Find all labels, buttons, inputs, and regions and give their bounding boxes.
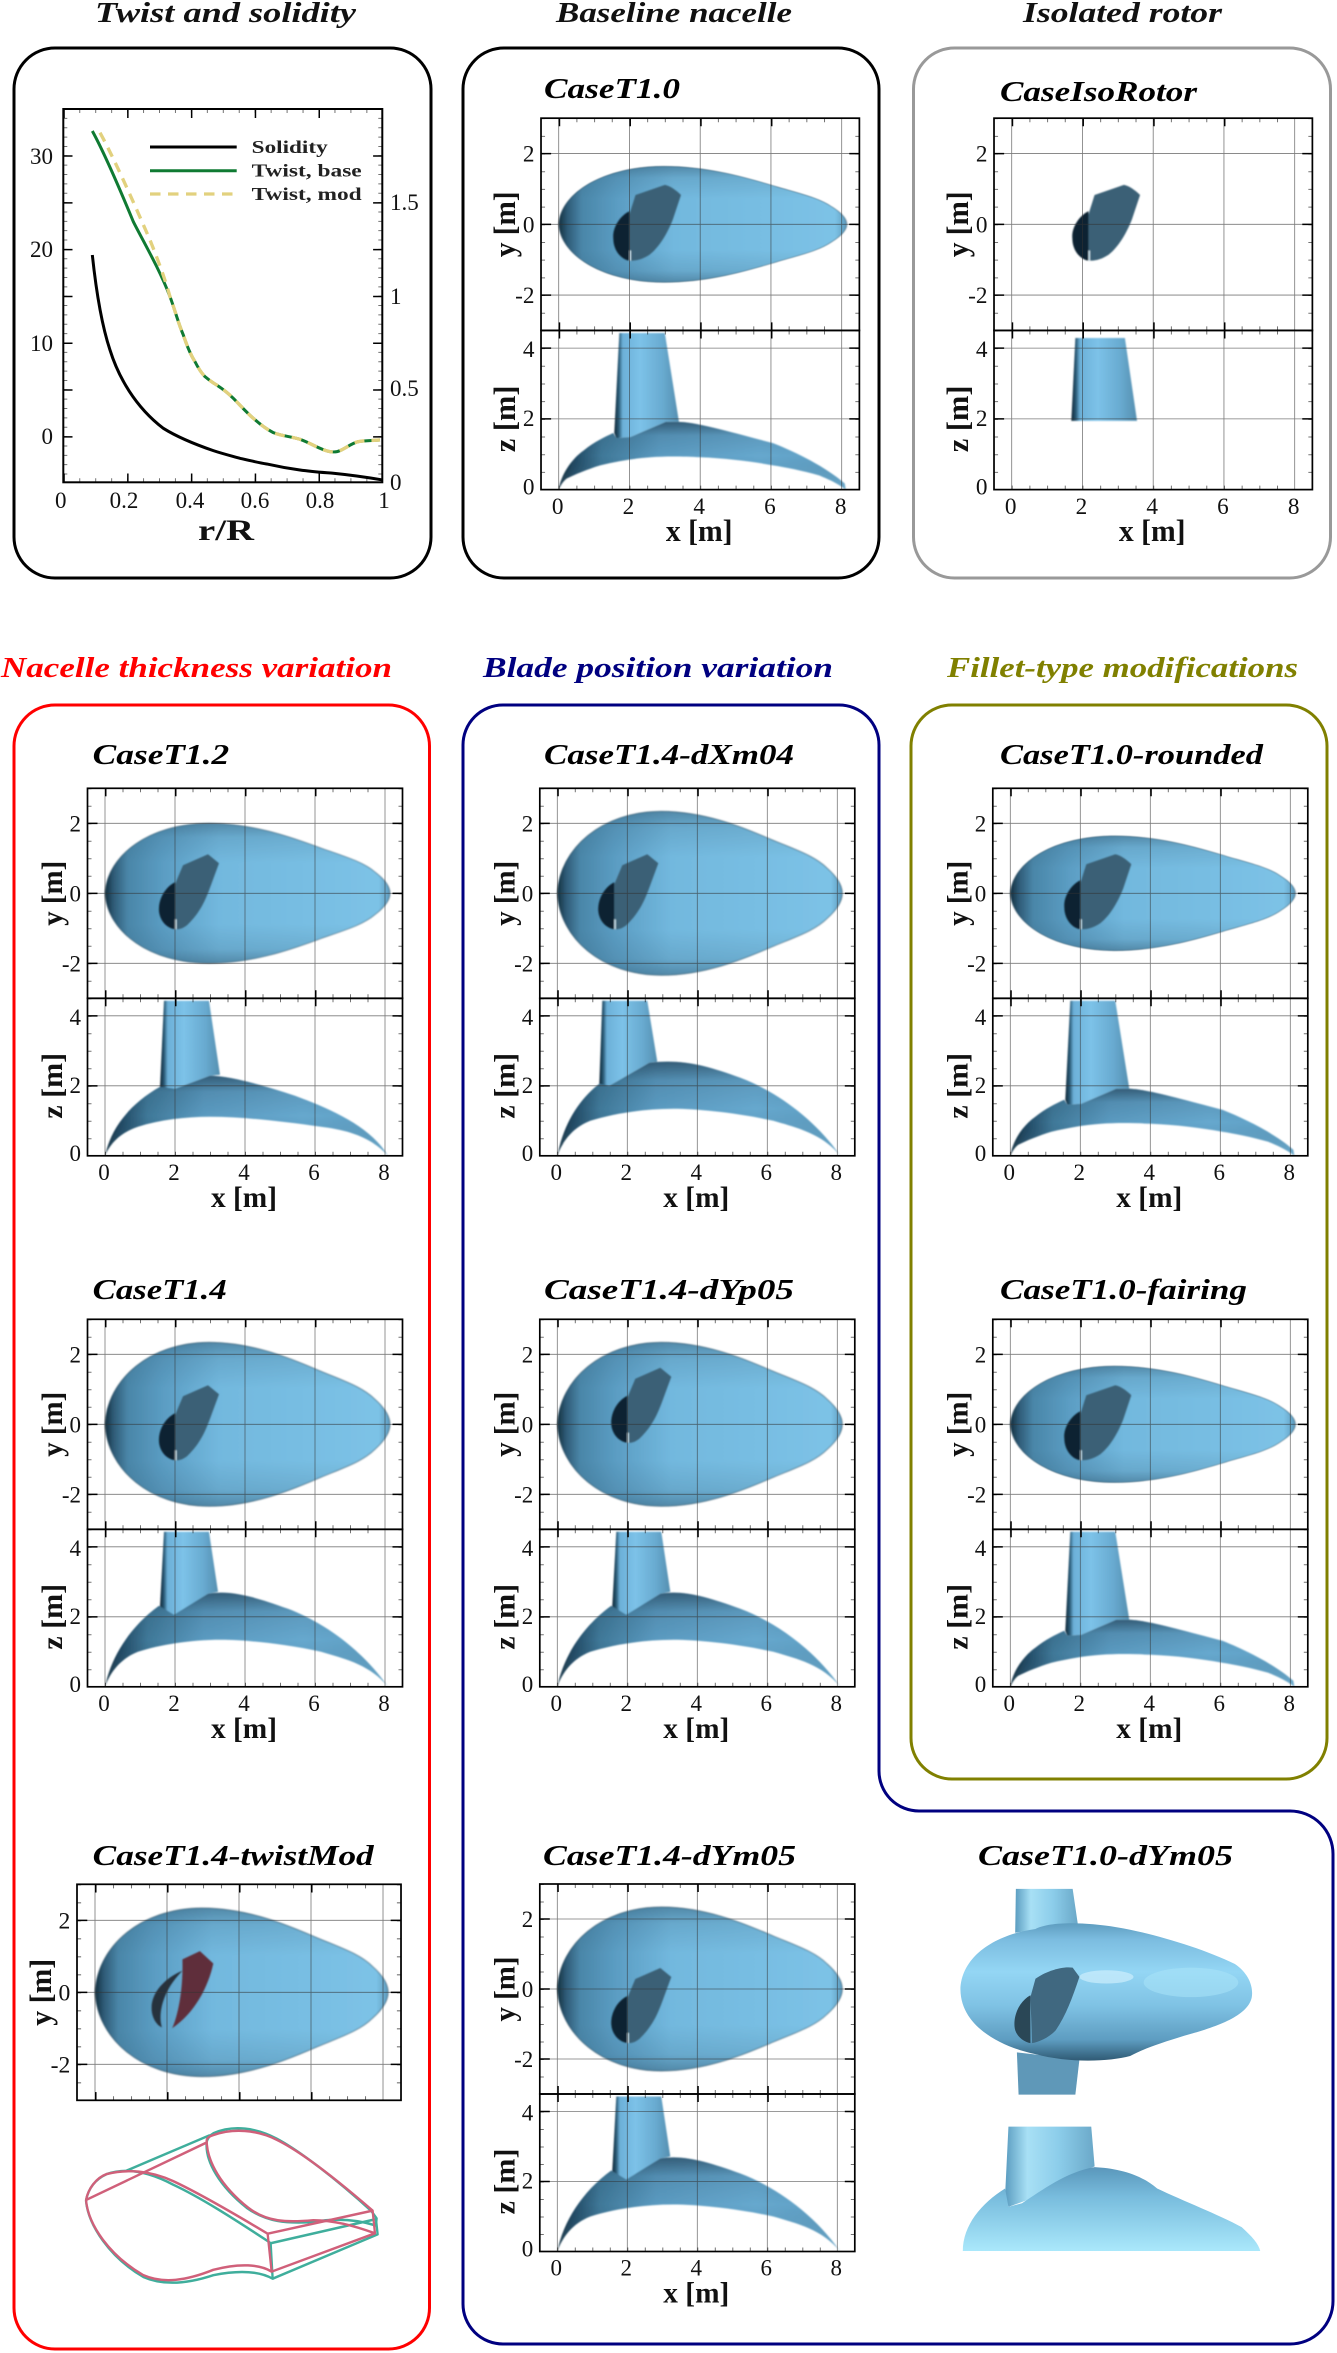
plot: CaseT1.4-dYm05 top and side views	[488, 1884, 855, 2310]
plot: CaseT1.4-dYm05 top and side views: 4	[691, 2256, 703, 2280]
plot: CaseT1.4 top and side views: x [m]	[211, 1712, 277, 1745]
left axis labels	[30, 144, 53, 449]
plot: CaseT1.4-dYp05 top and side views: 2	[621, 1691, 632, 1716]
plot: CaseT1.4 top and side views: 2	[168, 1691, 180, 1716]
plot: CaseT1.4-dXm04 top and side views: 0	[551, 1160, 562, 1185]
plot: CaseT1.4-dYp05 top and side views: 4	[691, 1691, 703, 1716]
plot: CaseT1.0 top and side views: 2	[623, 494, 634, 520]
plot: CaseT1.0-rounded top and side views	[941, 788, 1308, 1214]
plot: CaseT1.4-dYm05 top and side views: 0	[522, 1977, 533, 2002]
heading: Fillet-type modifications: Fillet-type modifications	[946, 652, 1298, 684]
right axis labels: 1.5	[390, 190, 419, 215]
plot: CaseT1.4 top and side views: 2	[70, 1604, 81, 1629]
plot: CaseIsoRotor top and side views: 2	[976, 142, 987, 168]
plot: CaseT1.4-twistMod top view: 0	[58, 1981, 70, 2007]
case title: CaseT1.4-twistMod: CaseT1.4-twistMod	[93, 1841, 375, 1872]
plot: CaseT1.0-fairing top and side views: -2	[967, 1482, 986, 1507]
case title: CaseT1.4-dYm05: CaseT1.4-dYm05	[543, 1841, 796, 1872]
right axis labels	[390, 190, 419, 495]
right axis labels: 0	[390, 470, 402, 495]
plot: CaseT1.4-dYp05 top and side views: 0	[522, 1672, 533, 1697]
panel: twist and solidity chart	[14, 48, 431, 578]
heading: Nacelle thickness variation: Nacelle thickness variation	[0, 652, 392, 684]
curve: solidity	[92, 255, 382, 480]
plot: CaseT1.4-twistMod top view: -2	[51, 2053, 70, 2079]
case title: CaseT1.0-fairing: CaseT1.0-fairing	[1000, 1275, 1247, 1306]
plot: CaseT1.4-twistMod top view: y [m]	[24, 1959, 58, 2026]
plot: CaseT1.4-dYm05 top and side views: 2	[621, 2256, 632, 2280]
plot: CaseT1.0 top and side views: 2	[523, 406, 534, 432]
plot: CaseIsoRotor top and side views: 0	[976, 475, 987, 501]
plot: CaseIsoRotor top and side views: 4	[976, 337, 988, 363]
rendering: CaseT1.0-dYm05 side view	[963, 2127, 1260, 2251]
legend: Twist, mod	[252, 184, 362, 204]
plot: CaseT1.4-dXm04 top and side views: 2	[522, 1073, 533, 1098]
case title: CaseT1.2: CaseT1.2	[93, 740, 229, 771]
plot: CaseT1.4-dYp05 top and side views: 2	[522, 1604, 533, 1629]
plot: CaseT1.2 top and side views	[36, 788, 402, 1214]
plot: CaseT1.0-rounded top and side views: 8	[1284, 1160, 1295, 1185]
case title: CaseT1.0: CaseT1.0	[544, 74, 680, 105]
plot: CaseT1.0 top and side views: 0	[523, 475, 534, 501]
plot: CaseT1.4-twistMod top view	[24, 1884, 401, 2100]
plot: CaseT1.2 top and side views: 0	[98, 1160, 110, 1185]
plot: CaseT1.4-dYp05 top and side views: 8	[831, 1691, 842, 1716]
plot: CaseT1.4-dYm05 top and side views: 2	[522, 2168, 533, 2194]
plot: CaseIsoRotor top and side views: 0	[1005, 494, 1017, 520]
plot: CaseIsoRotor top and side views: 6	[1217, 494, 1229, 520]
plot: CaseT1.4-dXm04 top and side views: 0	[522, 881, 533, 906]
plot: CaseT1.0 top and side views	[488, 118, 859, 548]
panel: nacelle thickness variation	[14, 705, 430, 2349]
plot: CaseT1.4-dYp05 top and side views: -2	[514, 1482, 533, 1507]
plot: CaseT1.4-dXm04 top and side views: 4	[522, 1005, 534, 1030]
plot: CaseT1.4 top and side views: y [m]	[36, 1392, 69, 1457]
plot: CaseT1.4 top and side views: -2	[62, 1482, 81, 1507]
plot: CaseT1.2 top and side views: 0	[70, 1141, 81, 1166]
plot: CaseT1.4-dYm05 top and side views: 2	[522, 1907, 533, 1932]
curve: twist, base	[92, 131, 380, 452]
plot: CaseT1.4 top and side views: 0	[70, 1672, 81, 1697]
plot: CaseT1.0-fairing top and side views: 0	[1004, 1691, 1015, 1716]
plot: CaseT1.4 top and side views: 4	[70, 1536, 82, 1561]
plot: CaseT1.0-fairing top and side views: x [m]	[1116, 1712, 1182, 1745]
plot: CaseT1.0-rounded top and side views: y [m]	[941, 861, 974, 926]
plot: CaseT1.4-dYp05 top and side views	[488, 1319, 855, 1745]
plot: CaseIsoRotor top and side views: 2	[976, 406, 987, 432]
plot: CaseT1.0-rounded top and side views: 4	[1144, 1160, 1156, 1185]
plot: CaseT1.0-fairing top and side views: 4	[975, 1536, 987, 1561]
plot: CaseT1.4-dXm04 top and side views: y [m]	[488, 861, 521, 926]
plot: CaseT1.0-fairing top and side views: 4	[1144, 1691, 1156, 1716]
plot: CaseT1.2 top and side views: 2	[70, 811, 81, 836]
plot: CaseT1.0 top and side views: 0	[552, 494, 564, 520]
plot: CaseT1.4-dYm05 top and side views: y [m]	[488, 1956, 521, 2022]
plot: CaseT1.4-dXm04 top and side views	[488, 788, 855, 1214]
case title: CaseT1.4-dXm04: CaseT1.4-dXm04	[544, 740, 794, 771]
case title: CaseT1.4-dYp05: CaseT1.4-dYp05	[544, 1275, 794, 1306]
plot: CaseIsoRotor top and side views: z [m]	[941, 386, 975, 452]
plot: CaseT1.4-dYm05 top and side views: 6	[761, 2256, 772, 2280]
plot: CaseT1.4-dYm05 top and side views: 0	[551, 2256, 562, 2280]
x axis labels: 0.8	[306, 488, 334, 513]
plot: CaseT1.2 top and side views: 4	[70, 1005, 82, 1030]
plot: CaseT1.0-rounded top and side views: 6	[1214, 1160, 1225, 1185]
plot: CaseT1.4 top and side views: 4	[238, 1691, 250, 1716]
plot: CaseT1.0-rounded top and side views: 2	[1074, 1160, 1085, 1185]
plot: CaseT1.2 top and side views: x [m]	[211, 1181, 277, 1214]
x axis labels: 0.2	[110, 488, 138, 513]
left axis labels: 0	[42, 424, 53, 449]
plot: CaseT1.0-fairing top and side views: 2	[975, 1342, 986, 1367]
plot: CaseT1.0-rounded top and side views: 0	[975, 1141, 986, 1166]
plot: CaseIsoRotor top and side views: 0	[976, 212, 987, 238]
plot: CaseT1.2 top and side views: 6	[308, 1160, 320, 1185]
plot: CaseT1.0-fairing top and side views: 2	[1074, 1691, 1085, 1716]
plot: CaseT1.4-dXm04 top and side views: x [m]	[663, 1181, 729, 1214]
legend	[150, 137, 362, 204]
x axis labels: 0	[55, 488, 66, 513]
case title: CaseT1.0-rounded: CaseT1.0-rounded	[1000, 740, 1264, 771]
plot: CaseT1.4-dXm04 top and side views: -2	[514, 951, 533, 976]
plot: CaseT1.0-fairing top and side views: 0	[975, 1412, 986, 1437]
right axis labels: 0.5	[390, 376, 419, 401]
plot: CaseT1.4-dXm04 top and side views: z [m]	[488, 1053, 521, 1119]
plot: CaseT1.4-dXm04 top and side views: 8	[831, 1160, 842, 1185]
plot: CaseT1.4-dXm04 top and side views: 6	[761, 1160, 772, 1185]
x axis labels: 1	[378, 488, 390, 513]
plot: CaseT1.4 top and side views: 0	[98, 1691, 110, 1716]
plot: CaseT1.4 top and side views: 2	[70, 1342, 81, 1367]
plot: CaseT1.0-rounded top and side views: x [m]	[1116, 1181, 1182, 1214]
plot: CaseT1.0-rounded top and side views: 4	[975, 1005, 987, 1030]
plot: CaseT1.0-fairing top and side views: z [m]	[941, 1584, 974, 1650]
plot: CaseT1.0 top and side views: -2	[515, 283, 534, 309]
plot: CaseT1.4-dYm05 top and side views: 8	[831, 2256, 842, 2280]
plot: CaseT1.2 top and side views: 2	[168, 1160, 180, 1185]
plot: CaseT1.0-rounded top and side views: z [m]	[941, 1053, 974, 1119]
heading: Blade position variation: Blade position variation	[482, 652, 833, 684]
plot: CaseT1.4-dYp05 top and side views: 0	[522, 1412, 533, 1437]
plot: CaseIsoRotor top and side views: x [m]	[1119, 514, 1186, 548]
plot: CaseT1.4-dYm05 top and side views: -2	[514, 2047, 533, 2072]
plot: CaseIsoRotor top and side views: 2	[1076, 494, 1087, 520]
left axis labels: 30	[30, 144, 53, 169]
x axis labels: 0.6	[241, 488, 269, 513]
plot: CaseT1.4-dYm05 top and side views: z [m]	[488, 2148, 521, 2214]
plot: CaseT1.4-dYp05 top and side views: y [m]	[488, 1392, 521, 1457]
plot: CaseT1.4-twistMod top view: 2	[58, 1909, 70, 1935]
plot: CaseT1.0 top and side views: 4	[693, 494, 705, 520]
curve: twist, mod (dashed)	[100, 133, 380, 452]
plot: CaseT1.0-rounded top and side views: -2	[967, 951, 986, 976]
plot: CaseT1.0-fairing top and side views	[941, 1319, 1308, 1745]
case title: CaseIsoRotor: CaseIsoRotor	[1000, 77, 1198, 108]
right axis labels: 1	[390, 284, 402, 309]
panel: isolated rotor	[914, 48, 1330, 578]
plot: CaseT1.0 top and side views: z [m]	[488, 386, 522, 452]
plot: CaseT1.4-dXm04 top and side views: 0	[522, 1141, 533, 1166]
plot: CaseT1.0 top and side views: 8	[835, 494, 846, 520]
plot: CaseT1.2 top and side views: z [m]	[36, 1053, 69, 1119]
plot: CaseT1.4-dYm05 top and side views: x [m]	[663, 2276, 729, 2310]
plot: CaseT1.4-dYp05 top and side views: 4	[522, 1536, 534, 1561]
plot: CaseT1.0-fairing top and side views: 0	[975, 1672, 986, 1697]
rendering: CaseT1.0-dYm05 top view	[960, 1889, 1252, 2095]
x axis title: r/R	[198, 514, 254, 547]
plot: CaseT1.0 top and side views: y [m]	[488, 191, 522, 257]
plot: CaseT1.0-rounded top and side views: 2	[975, 811, 986, 836]
plot: CaseIsoRotor top and side views: 8	[1288, 494, 1299, 520]
plot: CaseT1.4-dXm04 top and side views: 2	[522, 811, 533, 836]
diagram: blade section wireframes, base and modified twist	[86, 2128, 378, 2283]
plot: CaseT1.0 top and side views: x [m]	[666, 514, 733, 548]
plot: CaseT1.0 top and side views: 6	[764, 494, 776, 520]
panel: fillet-type modifications	[911, 705, 1327, 1779]
panel: baseline nacelle	[463, 48, 879, 578]
plot: CaseT1.0 top and side views: 4	[523, 337, 535, 363]
plot: CaseT1.4-dYp05 top and side views: 2	[522, 1342, 533, 1367]
plot: CaseT1.4 top and side views	[36, 1319, 402, 1745]
plot: CaseT1.4 top and side views: z [m]	[36, 1584, 69, 1650]
plot: CaseT1.0 top and side views: 2	[523, 142, 534, 168]
legend: Twist, base	[252, 161, 362, 181]
plot: CaseT1.4-dYm05 top and side views: 4	[522, 2100, 534, 2126]
plot: CaseT1.0-fairing top and side views: 2	[975, 1604, 986, 1629]
plot: CaseIsoRotor top and side views	[941, 118, 1312, 548]
plot: CaseT1.0 top and side views: 0	[523, 212, 534, 238]
x axis labels	[55, 488, 390, 513]
left axis labels: 10	[30, 331, 53, 356]
plot: CaseIsoRotor top and side views: 4	[1146, 494, 1158, 520]
plot: CaseIsoRotor top and side views: -2	[968, 283, 987, 309]
plot: CaseT1.4-dYp05 top and side views: 0	[551, 1691, 562, 1716]
plot: CaseT1.0-rounded top and side views: 2	[975, 1073, 986, 1098]
x axis labels: 0.4	[176, 488, 205, 513]
plot: CaseT1.0-fairing top and side views: 6	[1214, 1691, 1225, 1716]
plot: CaseT1.4-dYp05 top and side views: x [m]	[663, 1712, 729, 1745]
plot: CaseT1.4-dYp05 top and side views: z [m]	[488, 1584, 521, 1650]
plot: CaseT1.2 top and side views: 2	[70, 1073, 81, 1098]
plot: CaseT1.2 top and side views: 8	[378, 1160, 390, 1185]
plot: CaseT1.2 top and side views: 0	[70, 881, 81, 906]
plot: CaseT1.0-fairing top and side views: 8	[1284, 1691, 1295, 1716]
plot: CaseT1.4-dYp05 top and side views: 6	[761, 1691, 772, 1716]
plot: CaseT1.0-rounded top and side views: 0	[975, 881, 986, 906]
plot: CaseT1.4 top and side views: 8	[378, 1691, 390, 1716]
plot: CaseT1.2 top and side views: 4	[238, 1160, 250, 1185]
plot: CaseT1.4-dXm04 top and side views: 2	[621, 1160, 632, 1185]
panel: blade position variation	[463, 705, 1333, 2344]
line chart: solidity and twist vs r/R	[30, 108, 419, 547]
plot: CaseT1.0-fairing top and side views: y [m]	[941, 1392, 974, 1457]
plot: CaseT1.0-rounded top and side views: 0	[1004, 1160, 1015, 1185]
plot: CaseT1.2 top and side views: -2	[62, 951, 81, 976]
plot: CaseT1.4 top and side views: 6	[308, 1691, 320, 1716]
plot: CaseT1.4-dYm05 top and side views: 0	[522, 2236, 533, 2262]
plot: CaseT1.4-dXm04 top and side views: 4	[691, 1160, 703, 1185]
legend: Solidity	[252, 137, 328, 157]
plot: CaseT1.4 top and side views: 0	[70, 1412, 81, 1437]
case title: CaseT1.4: CaseT1.4	[93, 1275, 227, 1306]
left axis labels: 20	[30, 237, 53, 262]
plot: CaseIsoRotor top and side views: y [m]	[941, 191, 975, 257]
plot: CaseT1.2 top and side views: y [m]	[36, 861, 69, 926]
case title: CaseT1.0-dYm05: CaseT1.0-dYm05	[978, 1841, 1233, 1872]
